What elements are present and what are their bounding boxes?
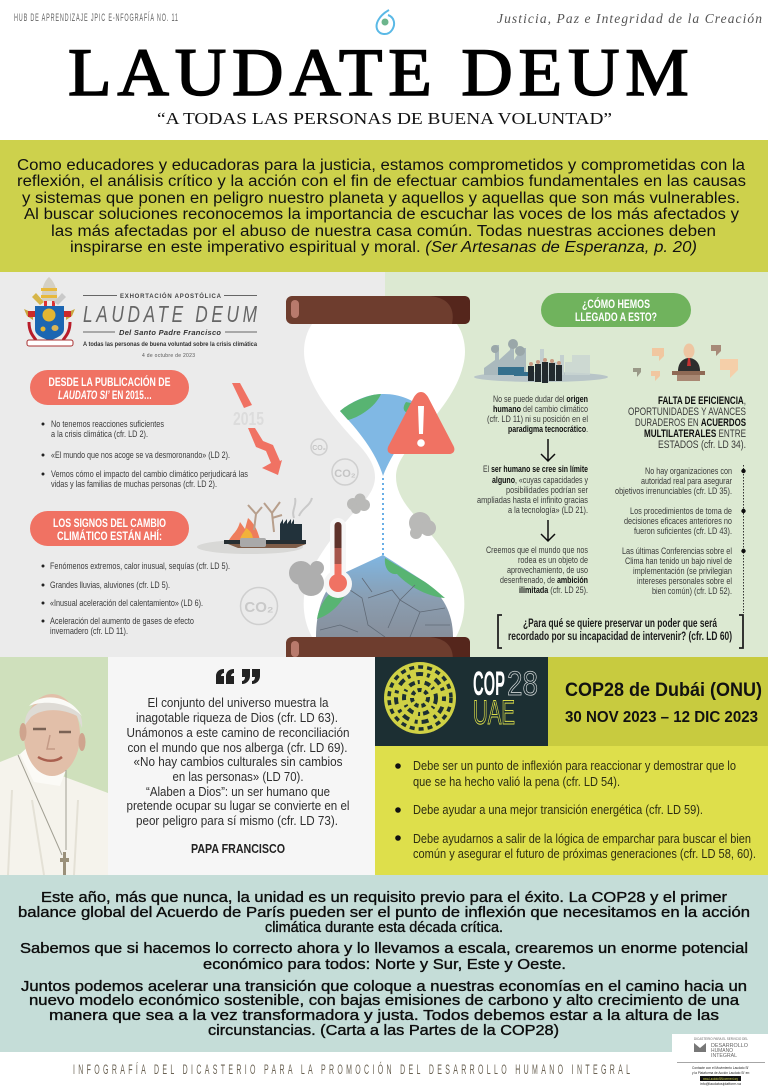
earth top [340, 394, 426, 476]
list: climate signs [42, 561, 230, 637]
panel: Pope quote: El conjunto del universo muestra la [148, 695, 329, 710]
panel: introduction: y sistemas que ponen en peligro nuestro planeta y aquellos y aquellas que son más vulnerables. [22, 190, 740, 207]
list: since 2015: vidas y las familias de muchas personas (cfr. LD 2). [51, 479, 217, 490]
icons: CO2 circles: CO₂ [244, 599, 274, 616]
text column: human origin: Creemos que el mundo que nos [486, 545, 588, 556]
smoke clouds [347, 494, 436, 539]
face [24, 694, 80, 776]
top bar [286, 296, 470, 324]
panel: Pope quote [108, 657, 375, 875]
text column: lack of efficiency: DURADEROS EN ACUERDOS [635, 417, 746, 429]
illustration: burning landscape and factory [197, 498, 312, 554]
callout: signs of climate change: LOS SIGNOS DEL CAMBIO [53, 516, 166, 530]
panel: Pope quote: pretende ocupar su lugar se convierte en el [126, 798, 350, 813]
text column: human origin: ilimitada (cfr. LD 25). [519, 585, 588, 596]
logo: dicastery: Contacte con el Movimiento Laudato Si’ [692, 1066, 749, 1070]
panel: introduction: Como educadores y educadoras para la justicia, estamos comprometidos y comprometidas con la [17, 157, 745, 174]
callout: signs of climate change: CLIMÁTICO ESTÁN AHÍ: [57, 528, 162, 543]
icons: CO2 circles [240, 439, 358, 624]
panel: exhortation heading: A todas las personas de buena voluntad sobre la crisis climática [83, 342, 258, 348]
text column: lack of efficiency: intereses personales sobre el [637, 576, 732, 587]
icons: CO2 circles: CO₂ [312, 445, 326, 452]
hourglass glass [304, 324, 465, 637]
logo: dicastery: www.LaudatoSiMovement.org [703, 1077, 738, 1081]
panel: exhortation heading: 4 de octubre de 2023 [142, 353, 195, 359]
list: climate signs: Grandes lluvias, aluviones (cfr. LD 5). [50, 580, 170, 591]
panel: introduction: las más afectadas por el abuso de nuestra casa común. Todas nuestras acciones deben [51, 223, 716, 240]
text column: human origin: El ser humano se cree sin límite [483, 464, 588, 475]
panel: letter to the parties: Juntos podemos acelerar una transición que coloque a nuestras economías en el camino hacia un [21, 979, 747, 995]
illustration: speaker and thumbs down [633, 344, 738, 381]
list: climate signs: «Inusual aceleración del calentamiento» (LD 6). [50, 598, 203, 609]
list: since 2015: a la crisis climática (cfr. LD 2). [51, 429, 148, 440]
list: climate signs: Aceleración del aumento de gases de efecto [50, 616, 194, 627]
text column: human origin: a la tecnología» (LD 21). [508, 505, 588, 516]
icon: papal coat of arms [24, 277, 75, 346]
panel: introduction: inspirarse en este imperativo espiritual y moral. (Ser Artesanas de Esperanza, p. 20) [70, 239, 697, 256]
callout: bracketed question [498, 615, 743, 648]
panel: letter to the parties: circunstancias. (Carta a las Partes de la COP28) [208, 1023, 559, 1039]
callout: how did we get here: ¿CÓMO HEMOS [582, 296, 650, 311]
text column: lack of efficiency: Las últimas Conferencias sobre el [622, 546, 732, 557]
panel: Pope quote: PAPA FRANCISCO [191, 842, 285, 856]
icons: CO2 circles: CO₂ [334, 468, 356, 480]
text column: lack of efficiency: MULTILATERALES ENTRE [644, 428, 746, 440]
icon: quotation marks [216, 669, 260, 684]
panel: COP28 heading: 30 NOV 2023 – 12 DIC 2023 [565, 709, 758, 726]
text column: human origin: rodea es un objeto de [518, 555, 588, 566]
text column: human origin: aprovechamiento, de uso [507, 565, 588, 576]
panel: COP28 logo [375, 657, 548, 746]
icon: COP28 globe [384, 662, 456, 734]
text column: lack of efficiency: autoridad real para asegurar [641, 476, 732, 487]
panel: letter to the parties [0, 875, 768, 1052]
panel: COP28 list [375, 746, 768, 875]
panel: COP28 heading: COP28 de Dubái (ONU) [565, 680, 762, 701]
rule top [83, 296, 257, 332]
arrow: down 2 [541, 520, 555, 541]
text column: lack of efficiency [615, 395, 746, 613]
text column: human origin: paradigma tecnocrático. [508, 424, 588, 435]
pectoral chain [18, 755, 66, 855]
panel: Pope quote: Unámonos a este camino de reconciliación [126, 725, 350, 740]
panel: COP28 logo: UAE [473, 694, 515, 732]
arrow: down 1 [541, 439, 555, 461]
text column: human origin: humano del cambio climático [493, 404, 588, 415]
callout: signs of climate change [30, 511, 189, 546]
panel: right green background [385, 272, 768, 657]
panel: COP28 list: Debe ayudar a una mejor transición energética (cfr. LD 59). [413, 802, 703, 817]
panel: COP28 heading [548, 657, 768, 746]
logo: dicastery: DESARROLLO [711, 1043, 749, 1049]
text column: lack of efficiency: bien común) (cfr. LD 52). [652, 586, 732, 597]
panel: Pope quote: con el mundo que nos alberga (cfr. LD 69). [128, 740, 348, 755]
logo: dicastery: info@laudatosiplatform.va [700, 1082, 741, 1086]
panel: Pope quote: inagotable riqueza de Dios (cfr. LD 63). [136, 710, 338, 725]
callout: how did we get here: LLEGADO A ESTO? [575, 310, 657, 324]
arrow: temperature trend [232, 383, 282, 475]
list: climate signs: Fenómenos extremos, calor inusual, sequías (cfr. LD 5). [50, 561, 230, 572]
icon: thermometer [324, 518, 352, 598]
panel: exhortation heading: LAUDATE DEUM [83, 303, 257, 328]
panel: COP28 logo: 28 [507, 665, 538, 703]
list: since 2015: «El mundo que nos acoge se va desmoronando» (LD 2). [51, 450, 230, 461]
title: LAUDATE DEUM [68, 36, 695, 111]
hourglass [286, 296, 470, 637]
text column: lack of efficiency: No hay organizaciones con [645, 466, 732, 477]
text column: human origin: alguno, «cuyas capacidades y [492, 475, 588, 486]
text column: lack of efficiency: implementación (se privilegian [633, 566, 732, 577]
footer text: INFOGRAFÍA DEL DICASTERIO PARA LA PROMOCIÓN DEL DESARROLLO HUMANO INTEGRAL [73, 1061, 630, 1078]
panel: letter to the parties: nuevo modelo económico sostenible, con bajas emisiones de carbono y alto crecimiento de una [29, 993, 739, 1009]
text column: human origin: (cfr. LD 11) ni su posición en el [487, 414, 588, 425]
panel: introduction: reflexión, el análisis crítico y la acción con el fin de efectuar cambios fundamentales en las causas [17, 173, 746, 190]
header [14, 10, 762, 34]
logo: dicastery: INTEGRAL [711, 1053, 737, 1059]
panel: Pope photo [0, 657, 108, 875]
callout: since 2015: LAUDATO SI’ EN 2015… [58, 388, 152, 402]
panel: Pope quote: en las personas» (LD 70). [172, 769, 304, 784]
panel: Pope quote: peor peligro para sí mismo (cfr. LD 73). [136, 813, 338, 828]
panel: introduction [0, 140, 768, 272]
panel: exhortation heading: EXHORTACIÓN APOSTÓLICA [120, 292, 222, 300]
panel: exhortation heading: Del Santo Padre Francisco [119, 328, 221, 337]
panel: Pope quote: «No hay cambios culturales sin cambios [134, 754, 343, 769]
year label: 2015 [233, 409, 264, 429]
falling sand [382, 478, 384, 556]
text column: human origin: ampliadas hasta el infinito gracias [477, 495, 588, 506]
text column: human origin: desenfrenado, de ambición [500, 575, 588, 586]
text column: human origin [477, 394, 588, 596]
robes [0, 754, 108, 875]
list: since 2015: No tenemos reacciones suficientes [51, 419, 164, 430]
panel: Pope quote: “Alaben a Dios”: un ser humano que [146, 784, 330, 799]
text column: lack of efficiency: Los procedimientos de toma de [630, 506, 732, 517]
text column: lack of efficiency: decisiones eficaces anteriores no [624, 516, 732, 527]
icon: JPIC logo [377, 10, 394, 34]
list: since 2015: Vemos cómo el impacto del cambio climático perjudicará las [51, 469, 248, 480]
illustration: industry and businessmen [474, 339, 608, 383]
logo: dicastery [672, 1034, 768, 1088]
logo: dicastery: HUMANO [711, 1048, 734, 1054]
logo: dicastery: y la Plataforma de Acción Laudato Si’ en: [692, 1071, 750, 1075]
list: since 2015 [42, 419, 248, 490]
panel: letter to the parties: Sabemos que si hacemos lo correcto ahora y lo llevamos a escala, crearemos un enorme potencial [20, 941, 748, 957]
header left label: HUB DE APRENDIZAJE JPIC E-NFOGRAFÍA NO. 11 [14, 11, 178, 24]
header right label: Justicia, Paz e Integridad de la Creación [497, 11, 762, 26]
subtitle: “A TODAS LAS PERSONAS DE BUENA VOLUNTAD” [157, 109, 612, 128]
panel: COP28 logo: COP [473, 665, 505, 703]
panel: left grey background [0, 272, 385, 657]
panel: letter to the parties: climática durante esta década crítica. [265, 920, 503, 936]
panel: letter to the parties: manera que sea a la vez transformadora y justa. Todos debemos estar a la altura de las [49, 1008, 719, 1024]
text column: lack of efficiency: fueron suficientes (cfr. LD 43). [634, 526, 732, 537]
bottom hourglass bar [286, 637, 470, 665]
text column: human origin: posibilidades podrían ser [506, 485, 588, 496]
panel: letter to the parties: balance global del Acuerdo de París pueden ser el punto de inflexión que necesitamos en la acción [18, 905, 750, 921]
callout: since 2015 [30, 370, 189, 405]
text column: lack of efficiency: Clima han tenido un bajo nivel de [625, 556, 732, 567]
logo: dicastery: DICASTERIO PARA EL SERVICIO DEL [694, 1037, 748, 1041]
text column: lack of efficiency: objetivos irrenunciables (cfr. LD 35). [615, 486, 732, 497]
timeline [741, 465, 746, 613]
text column: human origin: No se puede dudar del origen [493, 394, 588, 405]
icon: warning triangle [388, 392, 454, 454]
callout: since 2015: DESDE LA PUBLICACIÓN DE [48, 374, 170, 389]
panel: letter to the parties: económico para todos: Norte y Sur, Este y Oeste. [203, 957, 566, 973]
panel: letter to the parties: Este año, más que nunca, la unidad es un requisito previo para el éxito. La COP28 y el primer [41, 890, 727, 906]
callout: how did we get here [541, 293, 691, 327]
panel: exhortation heading [24, 277, 258, 359]
earth bottom [316, 555, 453, 637]
panel: introduction: Al buscar soluciones reconocemos la importancia de escuchar las voces de los más afectados y [24, 206, 739, 223]
list: climate signs: invernadero (cfr. LD 11). [50, 626, 128, 637]
text column: lack of efficiency: ESTADOS (cfr. LD 34). [658, 439, 746, 451]
panel: COP28 list: que se ha hecho valió la pena (cfr. LD 54). [413, 774, 620, 789]
